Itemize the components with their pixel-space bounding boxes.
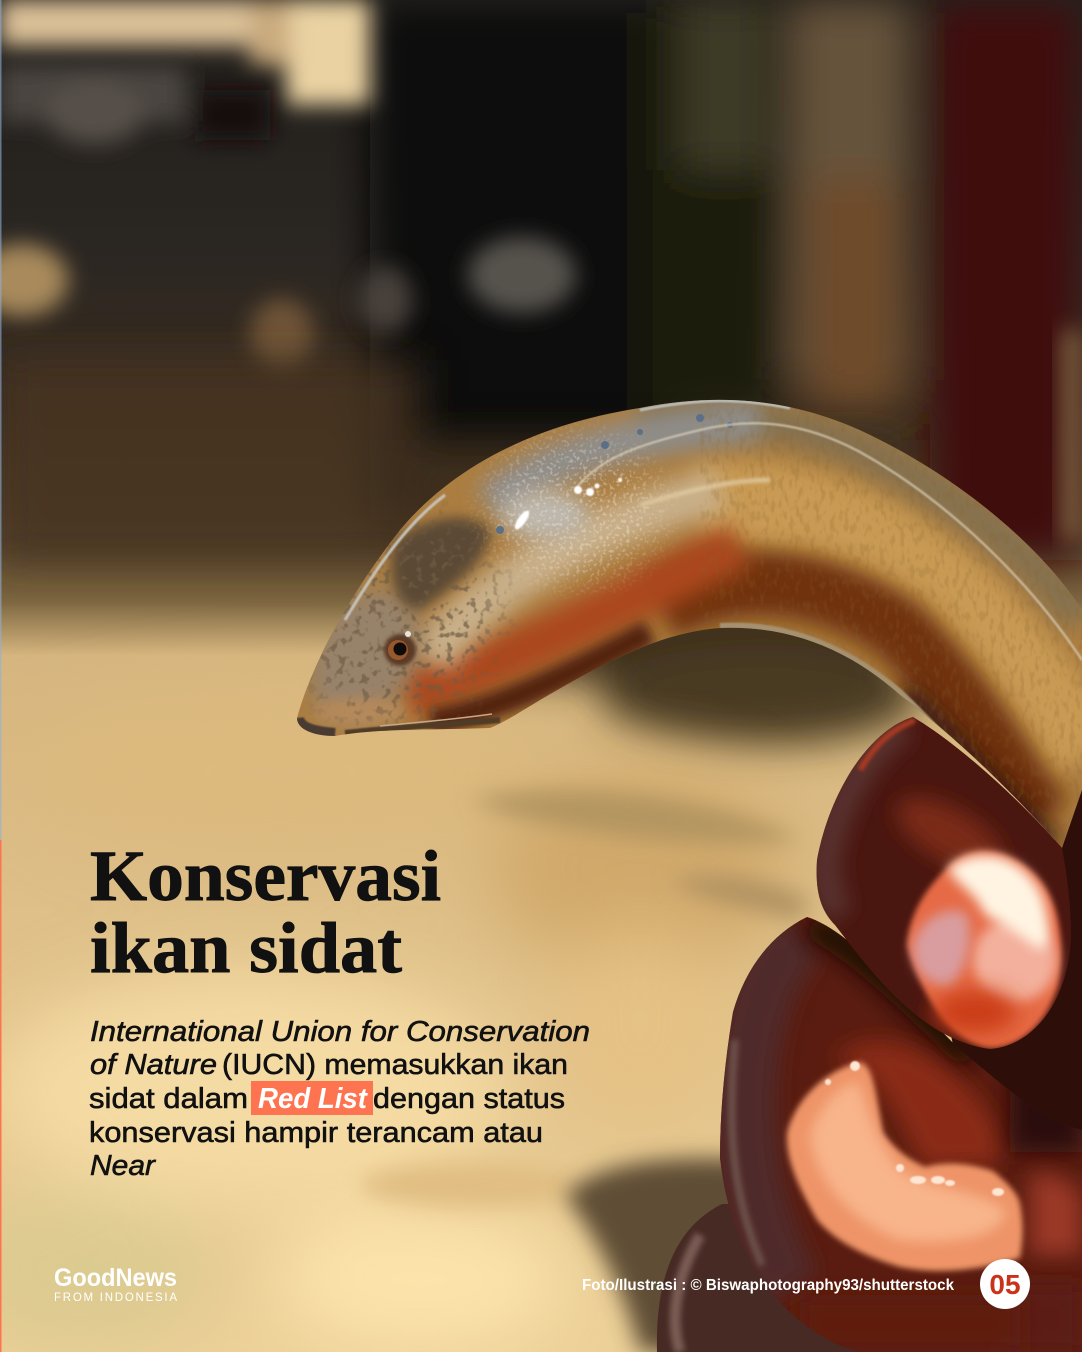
eel blue flecks [496, 414, 733, 534]
body text: sidat dalam [89, 1083, 248, 1115]
page number badge [980, 1259, 1030, 1309]
body text: International Union for Conservation [90, 1016, 590, 1048]
eel dark saddle [391, 518, 490, 610]
photo credit: Foto/Ilustrasi : © Biswaphotography93/shutterstock [582, 1277, 954, 1294]
lower dark band and sand [0, 360, 920, 745]
eel eye [384, 631, 416, 666]
logo: GoodNews from Indonesia [54, 1264, 177, 1304]
left edge accent line [0, 0, 2, 1352]
eel gold flank [700, 506, 1082, 760]
cream shapes top left [0, 0, 370, 105]
highlight: Red List: Red List [258, 1083, 368, 1115]
eel pale cheek [430, 490, 720, 660]
body text: (IUCN) memasukkan ikan [222, 1049, 568, 1081]
eel belly rim [719, 622, 944, 730]
dark right side [1010, 1060, 1082, 1152]
title [90, 836, 441, 988]
eel red throat [405, 545, 740, 695]
highlight pad [787, 1062, 1023, 1271]
grey shape top left [0, 66, 270, 144]
eel snout tip [297, 718, 335, 735]
title: Konservasi [90, 836, 441, 916]
bokeh lights [0, 237, 576, 371]
eel grey back [490, 420, 760, 505]
red lower right [1030, 1174, 1082, 1255]
dark central and right columns [370, 0, 1082, 560]
grey skin edge [744, 935, 800, 1290]
page number badge: 05 [989, 1269, 1021, 1300]
dark ground lower right [565, 1158, 760, 1352]
eel lateral line [575, 423, 1082, 660]
lower finger with glossy highlight [720, 917, 1082, 1352]
upper finger with nail [817, 717, 1071, 1049]
body text: Near [90, 1150, 156, 1182]
body text: of Nature [90, 1049, 217, 1081]
eel [280, 400, 1082, 860]
eel orange belly [660, 584, 1040, 820]
dark area behind fingers [950, 770, 1082, 1200]
body text: konservasi hampir terancam atau [89, 1117, 543, 1149]
hand holding the eel [657, 717, 1082, 1352]
sand streaks [360, 790, 810, 1207]
logo: GoodNews from Indonesia: FROM INDONESIA [54, 1292, 177, 1304]
red inner skin [830, 1041, 1001, 1168]
third finger [657, 1204, 880, 1352]
eel snout [314, 698, 406, 726]
eel skin texture [308, 504, 516, 728]
nail [907, 851, 1061, 1048]
dark crease under nail [810, 925, 970, 1060]
eel mouth [345, 720, 500, 733]
eel wet highlights [512, 478, 622, 531]
body text: dengan status [373, 1083, 565, 1115]
eel top sheen [345, 495, 445, 620]
eel head base [305, 582, 429, 708]
body text [89, 1016, 590, 1182]
eel dorsal band [640, 418, 1082, 620]
title: ikan sidat [90, 908, 402, 988]
logo: GoodNews from Indonesia: GoodNews [54, 1264, 177, 1292]
